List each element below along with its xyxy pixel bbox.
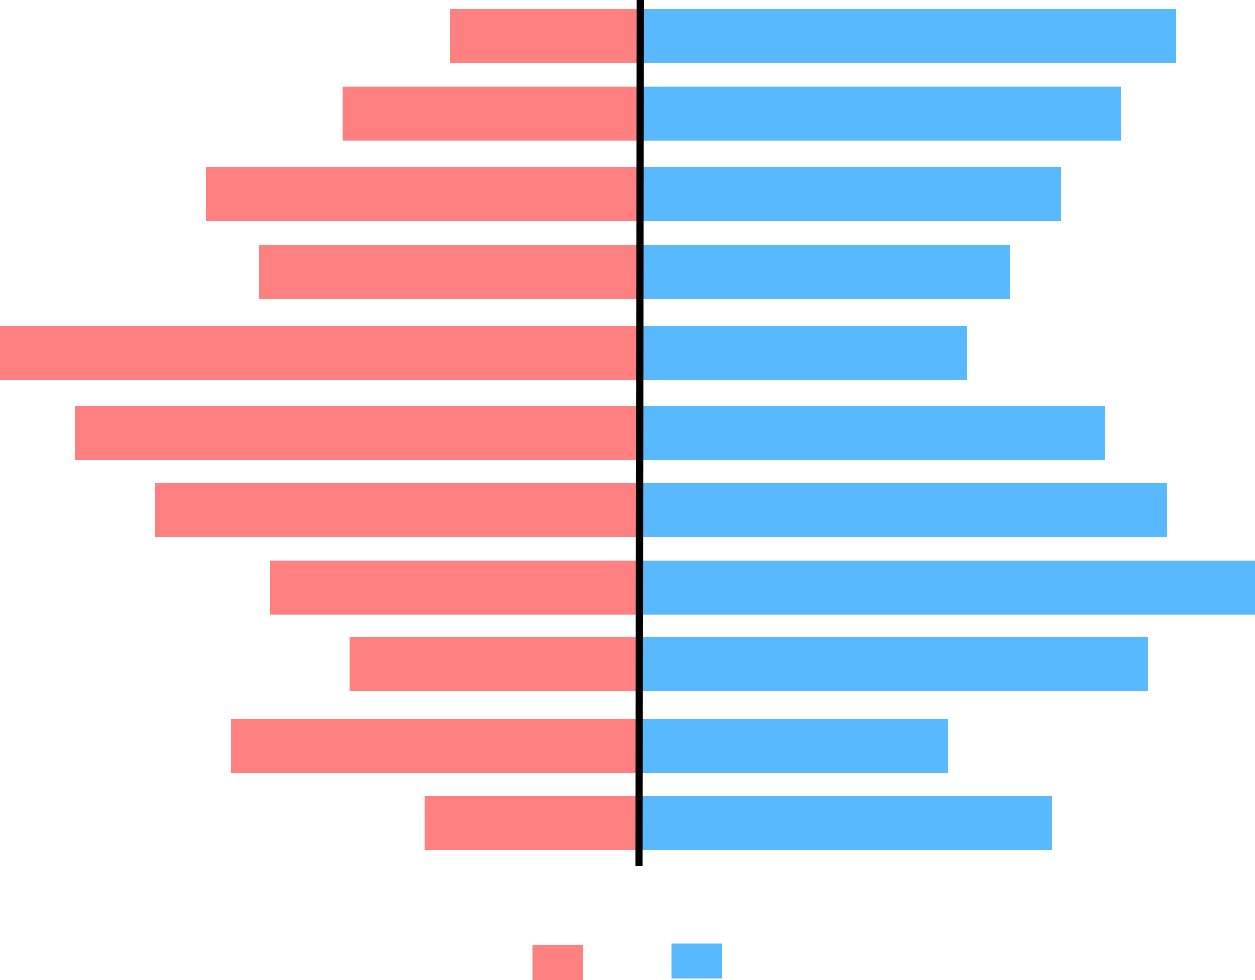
center axis line: [635, 0, 644, 866]
legend swatch: red: [532, 945, 583, 980]
blue bars: [640, 9, 1255, 850]
red bars: [0, 9, 640, 850]
legend swatch: blue: [672, 944, 722, 978]
